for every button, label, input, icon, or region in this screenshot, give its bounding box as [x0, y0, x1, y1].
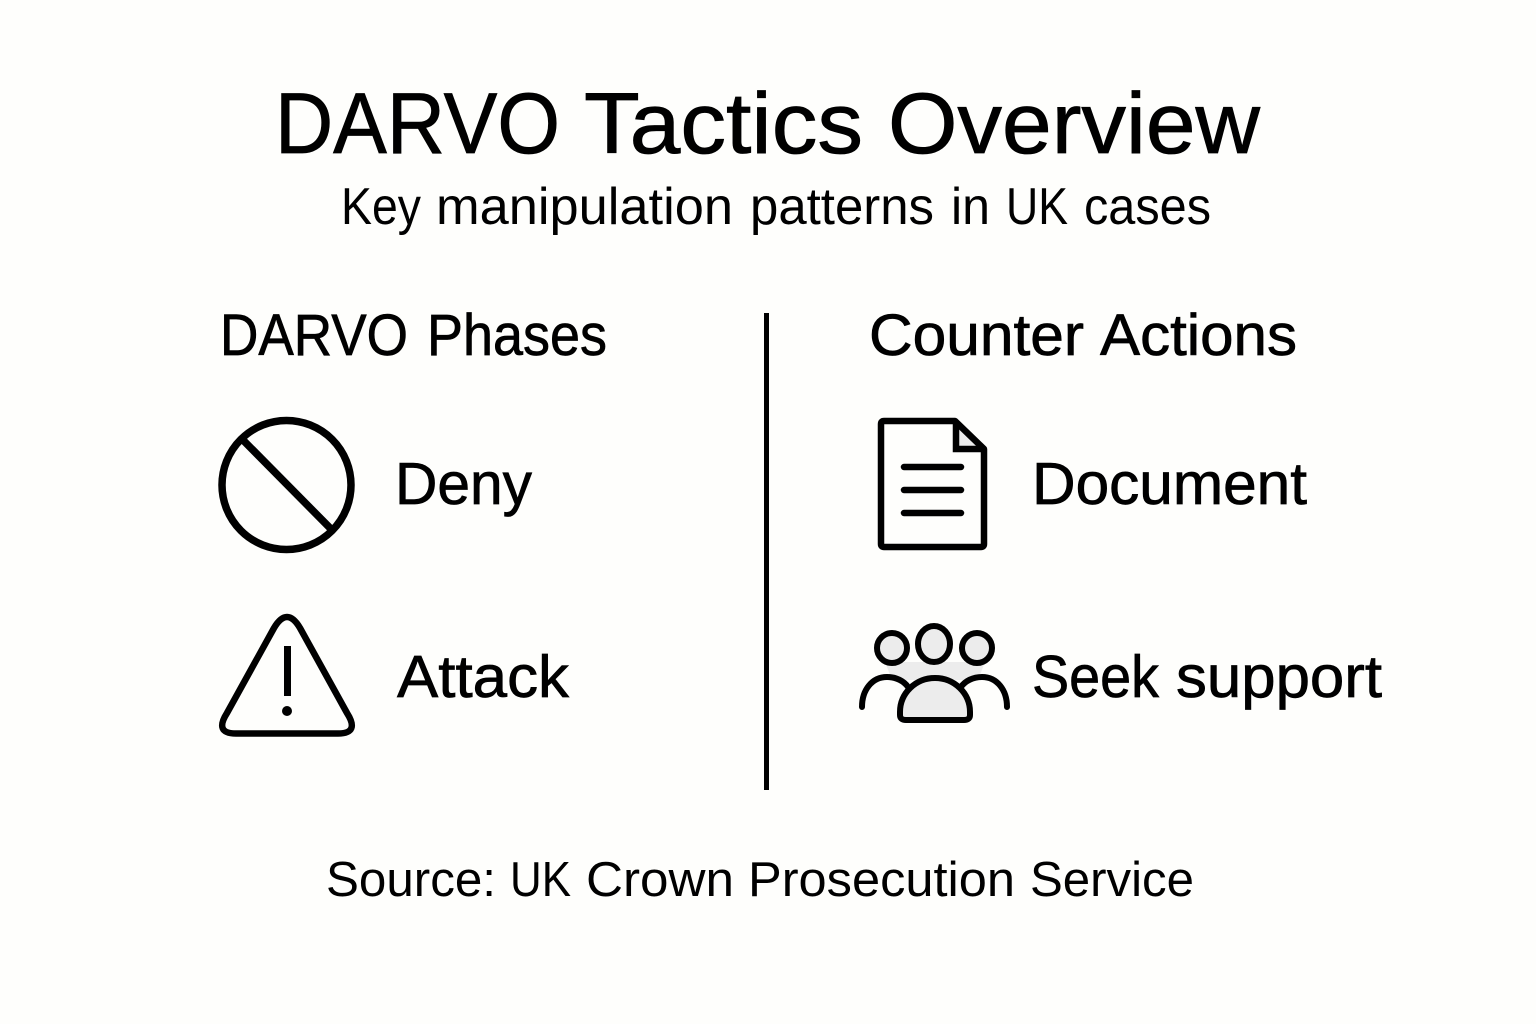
source line: Crown [586, 853, 734, 907]
title: Overview [888, 76, 1261, 172]
subtitle: cases [1084, 178, 1211, 236]
subtitle: manipulation [436, 178, 733, 236]
central divider [764, 313, 769, 790]
icon: support group of people [862, 626, 1007, 720]
subtitle: Key [341, 178, 421, 236]
heading: DARVO Phases: Phases [427, 303, 607, 368]
subtitle: patterns [750, 178, 934, 236]
heading: Counter Actions: Counter [869, 303, 1084, 368]
title: DARVO [275, 76, 560, 172]
heading: Counter Actions: Actions [1100, 303, 1297, 368]
icon: deny prohibition circle [222, 420, 351, 550]
label: Deny: Deny [395, 451, 532, 517]
source line: UK [510, 853, 571, 907]
heading: DARVO Phases: DARVO [220, 303, 408, 368]
label: Seek support: Seek [1032, 644, 1159, 710]
source line: Source: [326, 853, 496, 907]
icon: attack warning triangle [222, 617, 352, 734]
label: Seek support: support [1176, 644, 1382, 710]
source line: Service [1030, 853, 1194, 907]
title: Tactics [584, 76, 863, 172]
source line: Prosecution [748, 853, 1015, 907]
subtitle: UK [1006, 178, 1068, 236]
icon: document [881, 421, 984, 547]
subtitle: in [951, 178, 990, 236]
label: Attack: Attack [397, 644, 570, 710]
label: Document: Document [1032, 451, 1307, 517]
